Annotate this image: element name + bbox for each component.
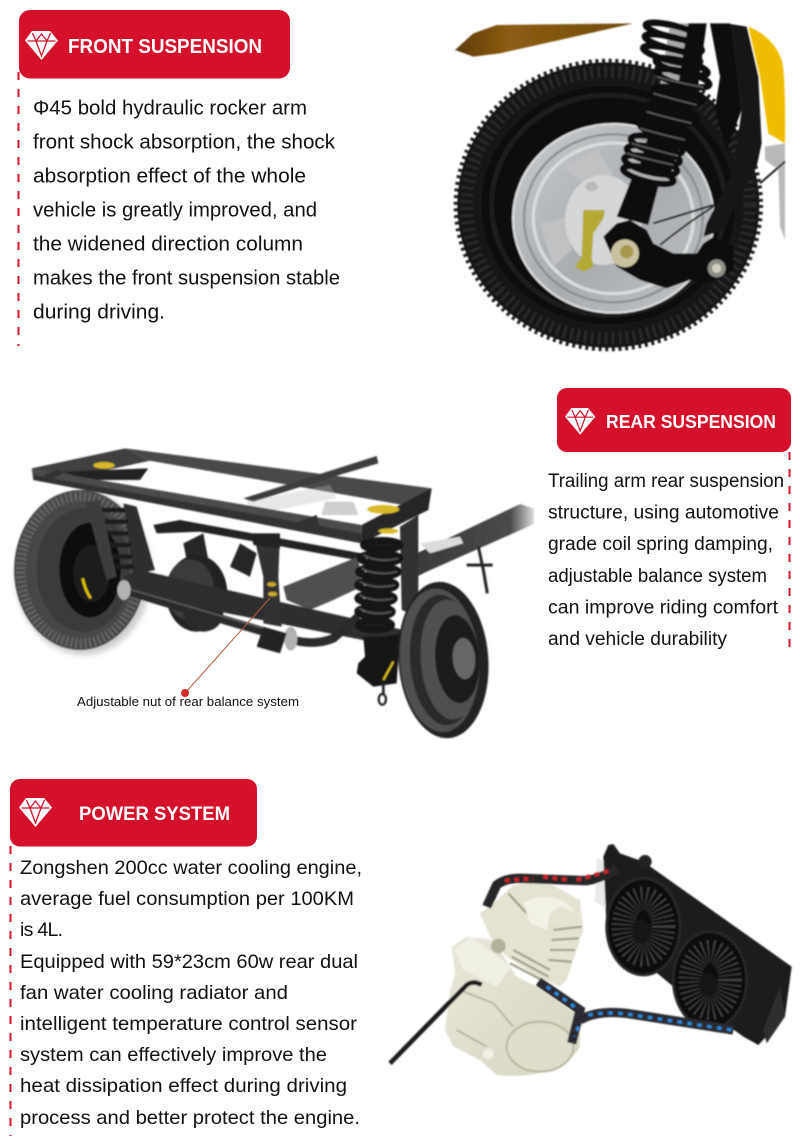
heading banner: power system (10, 779, 257, 846)
dashed side rule: front suspension (18, 72, 20, 346)
icon: diamond (19, 798, 52, 827)
illustration: rear chassis (14, 448, 534, 741)
heading banner: power system: POWER SYSTEM (79, 804, 230, 825)
right side (362, 488, 432, 543)
text block: power system description: intelligent temperature control sensor (20, 1013, 358, 1035)
heading banner: rear suspension (557, 388, 791, 452)
spring highlights (627, 77, 703, 165)
illustration: engine and radiator (390, 844, 792, 1076)
rim (513, 124, 714, 313)
clamp under front beam (252, 533, 280, 548)
differential (166, 555, 227, 632)
text block: power system description: heat dissipation effect during driving (20, 1075, 347, 1097)
clutch cover (507, 1022, 573, 1072)
leader dot (181, 689, 189, 697)
spring highlights (359, 555, 398, 614)
brackets behind axle (183, 533, 257, 577)
text block: front suspension description: during driving. (33, 302, 165, 324)
shock spring (621, 19, 711, 188)
cooling fins (508, 893, 582, 982)
tire (456, 61, 761, 349)
text block: rear suspension description (548, 471, 784, 650)
text block: power system description: Equipped with 59*23cm 60w rear dual (20, 951, 358, 973)
text block: front suspension description: makes the front suspension stable (33, 268, 340, 290)
text block: front suspension description: the widened direction column (33, 234, 303, 256)
fan 2 (673, 932, 747, 1028)
panel: front suspension (18, 10, 340, 346)
heading banner: front suspension: FRONT SUSPENSION (68, 36, 262, 58)
leader line (186, 598, 270, 692)
icon: diamond (25, 31, 58, 60)
text block: power system description (20, 857, 362, 1129)
right rim (393, 579, 494, 741)
text block: rear suspension description: adjustable balance system (548, 566, 767, 587)
hose: cold coolant, blue arrows (538, 982, 733, 1043)
left spring (98, 510, 133, 567)
cross beam (243, 456, 378, 502)
crankcase (445, 937, 580, 1076)
brake arm (575, 210, 605, 272)
text block: front suspension description: absorption effect of the whole (33, 166, 306, 188)
centre trailing arm (253, 533, 287, 653)
cylinder head (480, 880, 583, 987)
front beam (32, 468, 362, 543)
engine block (445, 880, 583, 1076)
fender (455, 23, 633, 57)
callout label: Adjustable nut of rear balance system (77, 694, 299, 709)
muffler (283, 557, 362, 610)
shock chrome shaft (660, 23, 703, 93)
axle bolt (611, 239, 639, 267)
bumps on front beam (43, 470, 320, 528)
spring core (638, 83, 697, 177)
lower cross member (153, 520, 362, 561)
radiator (603, 844, 792, 1045)
left bracket (123, 503, 155, 575)
back beam (125, 448, 432, 510)
text block: power system description: system can effectively improve the (20, 1044, 327, 1066)
white rear shock (322, 502, 358, 515)
starter motor (455, 937, 512, 987)
dashed side rule: power system (10, 846, 12, 1136)
text block: power system description: is 4L. (20, 919, 63, 941)
upper frame (32, 448, 432, 548)
callout: adjustable nut (77, 598, 299, 709)
rear axle (123, 570, 403, 647)
left side (32, 448, 150, 479)
text block: power system description: Zongshen 200cc water cooling engine, (20, 857, 362, 879)
yellow body panel (748, 27, 785, 143)
oil pipe (390, 982, 482, 1063)
text block: rear suspension description: and vehicle durability (548, 629, 727, 650)
text block: front suspension description: Φ45 bold hydraulic rocker arm (33, 98, 307, 120)
text block: power system description: average fuel consumption per 100KM (20, 888, 354, 910)
illustration: front wheel and shock absorber (455, 19, 785, 349)
text block: power system description: process and better protect the engine. (20, 1107, 360, 1129)
text block: front suspension description: front shock absorption, the shock (33, 132, 336, 154)
text block: rear suspension description: Trailing arm rear suspension (548, 471, 784, 492)
right pin (467, 547, 493, 593)
panel: power system (10, 779, 362, 1136)
left trailing arm (85, 500, 117, 580)
heading banner: front suspension (19, 10, 290, 78)
panel: rear suspension (548, 388, 791, 655)
swing arm bolt (708, 259, 726, 277)
fork pillar (703, 23, 762, 237)
anti-roll bar (123, 590, 358, 642)
right post (400, 515, 418, 617)
left wheel (14, 490, 152, 655)
heading banner: rear suspension: REAR SUSPENSION (606, 411, 776, 432)
right spring core (363, 543, 395, 630)
dashed side rule: rear suspension (788, 452, 790, 655)
text block: rear suspension description: can improve riding comfort (548, 598, 779, 618)
lower mount (357, 633, 400, 687)
text block: rear suspension description: grade coil spring damping, (548, 534, 773, 555)
hose: hot coolant, red arrows (487, 868, 617, 907)
cables (653, 162, 785, 245)
fan 1 (607, 878, 680, 975)
bracket (765, 143, 785, 240)
shock lower tube (617, 178, 658, 225)
text block: rear suspension description: structure, using automotive (548, 502, 779, 524)
text block: front suspension description: vehicle is greatly improved, and (33, 200, 317, 222)
yellow spring pads (93, 462, 399, 534)
text block: front suspension description (33, 98, 340, 324)
text block: power system description: fan water cooling radiator and (20, 982, 288, 1004)
swing arm (603, 220, 733, 288)
coolant tank (595, 858, 608, 908)
icon: diamond (565, 408, 595, 435)
right frame rail (417, 504, 534, 577)
bushings (117, 580, 297, 651)
right coil spring (357, 540, 400, 630)
